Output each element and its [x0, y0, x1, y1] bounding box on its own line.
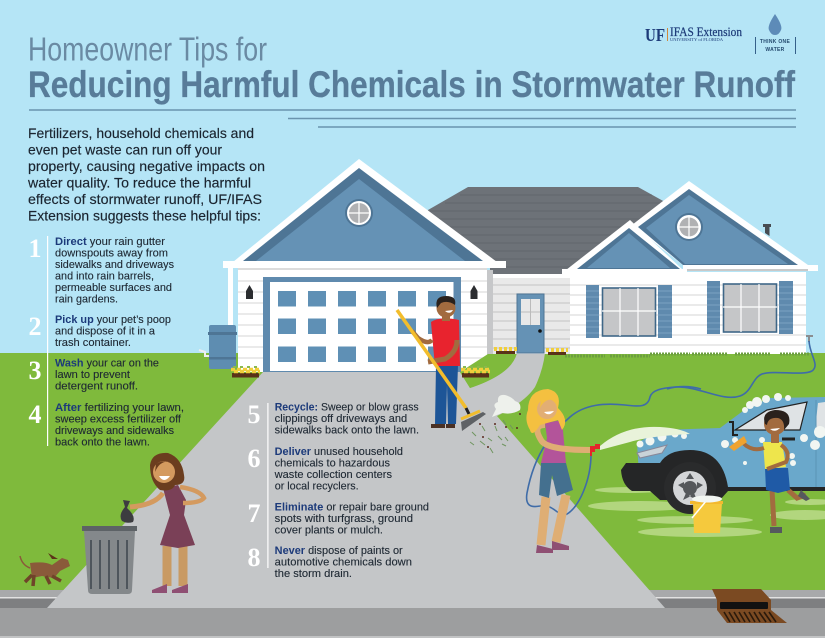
chimney vent	[763, 224, 771, 236]
lanterns	[246, 285, 478, 299]
tip 5: sidewalks back onto the lawn.	[275, 424, 419, 436]
green wedge by walkway	[460, 354, 516, 388]
bumper	[621, 450, 825, 500]
intro paragraph	[27, 126, 265, 224]
left window with shutters	[586, 285, 672, 338]
grass tufts	[565, 354, 810, 356]
intro paragraph: water quality. To reduce the harmful	[27, 176, 251, 190]
tip 5: Recycle: Sweep or blow grass	[275, 402, 419, 414]
tip 8	[248, 543, 412, 580]
tip 1: and into rain barrels,	[55, 270, 154, 282]
UF IFAS Extension logo: UF	[645, 25, 665, 45]
fascia	[223, 261, 506, 268]
intro paragraph: even pet waste can run off your	[28, 142, 222, 158]
right wing of house	[562, 181, 818, 354]
tip 6: 6	[248, 444, 260, 473]
spray of water	[600, 427, 690, 450]
tip 4: back onto the lawn.	[55, 436, 150, 448]
tip 2: trash container.	[55, 337, 131, 349]
door	[517, 294, 544, 353]
garage section	[223, 159, 506, 372]
tip 7: Eliminate or repair bare ground	[275, 501, 429, 513]
tip 3: 3	[28, 356, 42, 385]
trash can	[82, 526, 137, 594]
soap puddles	[588, 487, 825, 537]
tip 1	[28, 234, 175, 306]
tip 1: downspouts away from	[55, 248, 168, 260]
fascia	[683, 265, 818, 271]
tip 1: permeable surfaces and	[55, 282, 172, 294]
tip 6: or local recyclers.	[275, 480, 359, 492]
storm drain	[712, 589, 787, 623]
driveway and walkway	[47, 353, 665, 608]
tip 6: waste collection centers	[274, 469, 393, 481]
girl with bag	[130, 453, 204, 593]
tip 5: 5	[248, 400, 260, 429]
rain barrel	[199, 325, 237, 369]
Think One Water logo: THINK ONE	[760, 39, 790, 45]
tip 8: Never dispose of paints or	[275, 545, 403, 557]
title	[28, 30, 796, 105]
logos	[645, 14, 796, 54]
lawn	[0, 353, 825, 593]
downspout	[228, 268, 233, 328]
intro paragraph: Fertilizers, household chemicals and	[28, 126, 254, 141]
bucket	[690, 496, 723, 533]
dog	[20, 553, 70, 586]
wheel	[664, 462, 716, 514]
tip 3: detergent runoff.	[55, 380, 138, 392]
tips 1 to 4	[28, 234, 184, 448]
tip 7: 7	[248, 499, 260, 528]
headlight	[637, 445, 667, 458]
tip 1: rain gardens.	[55, 294, 118, 306]
tip 8: 8	[248, 543, 260, 572]
tip 7	[248, 499, 429, 536]
tip 3: Wash your car on the	[55, 358, 159, 370]
large gable	[632, 181, 808, 265]
spigot and garden hose	[527, 336, 815, 515]
curb and street	[0, 590, 825, 638]
nozzle	[590, 444, 600, 456]
tip 5	[248, 400, 419, 436]
flower beds	[231, 349, 568, 378]
boy washing car	[729, 410, 810, 533]
wall	[238, 268, 487, 372]
main gable	[233, 159, 497, 262]
tip 7: spots with turfgrass, ground	[275, 513, 413, 525]
soap foam	[636, 393, 825, 466]
tip 2: and dispose of it in a	[55, 326, 155, 338]
tip 2	[28, 312, 171, 349]
tip 6: Deliver unused household	[275, 446, 403, 458]
roof of center section	[420, 187, 665, 274]
UF IFAS Extension logo	[645, 25, 743, 45]
tip 8: automotive chemicals down	[275, 556, 412, 568]
tip 8: the storm drain.	[275, 568, 352, 580]
tip 6	[248, 444, 403, 492]
tip 7: cover plants or mulch.	[275, 524, 383, 536]
Think One Water logo: WATER	[765, 47, 785, 53]
woman with hose	[526, 389, 600, 553]
tip 3	[28, 356, 159, 392]
UF IFAS Extension logo: IFAS Extension	[670, 25, 743, 39]
man with broom	[397, 296, 486, 431]
trash bag	[121, 500, 134, 523]
tip 1: Direct your rain gutter	[55, 236, 165, 248]
tip 4: 4	[28, 400, 42, 429]
tip 4	[28, 400, 184, 448]
tip 4: sweep excess fertilizer off	[55, 414, 182, 426]
Think One Water logo	[756, 14, 796, 54]
intro paragraph: effects of stormwater runoff, UF/IFAS	[28, 192, 262, 207]
tip 5: clippings off driveways and	[275, 413, 407, 425]
UF IFAS Extension logo: UNIVERSITY of FLORIDA	[670, 37, 723, 42]
tip 3: lawn to prevent	[55, 369, 130, 381]
tip 4: driveways and sidewalks	[55, 425, 175, 437]
debris and dust cloud	[470, 395, 521, 453]
tip 2: Pick up your pet’s poop	[55, 314, 171, 326]
tips 5 to 8	[248, 400, 429, 580]
right window with shutters	[707, 281, 793, 334]
intro paragraph: property, causing negative impacts on	[28, 159, 265, 174]
center section wall	[492, 274, 572, 354]
tip 1: sidewalks and driveways	[55, 259, 175, 271]
small gable	[562, 220, 687, 275]
garage door	[263, 277, 461, 372]
intro paragraph: Extension suggests these helpful tips:	[28, 208, 261, 224]
tip 4: After fertilizing your lawn,	[55, 402, 184, 414]
tip 2: 2	[28, 312, 42, 341]
tip 1: 1	[28, 234, 42, 263]
car	[621, 393, 825, 514]
tip 6: chemicals to hazardous	[275, 458, 391, 470]
title: Homeowner Tips for	[28, 30, 267, 68]
